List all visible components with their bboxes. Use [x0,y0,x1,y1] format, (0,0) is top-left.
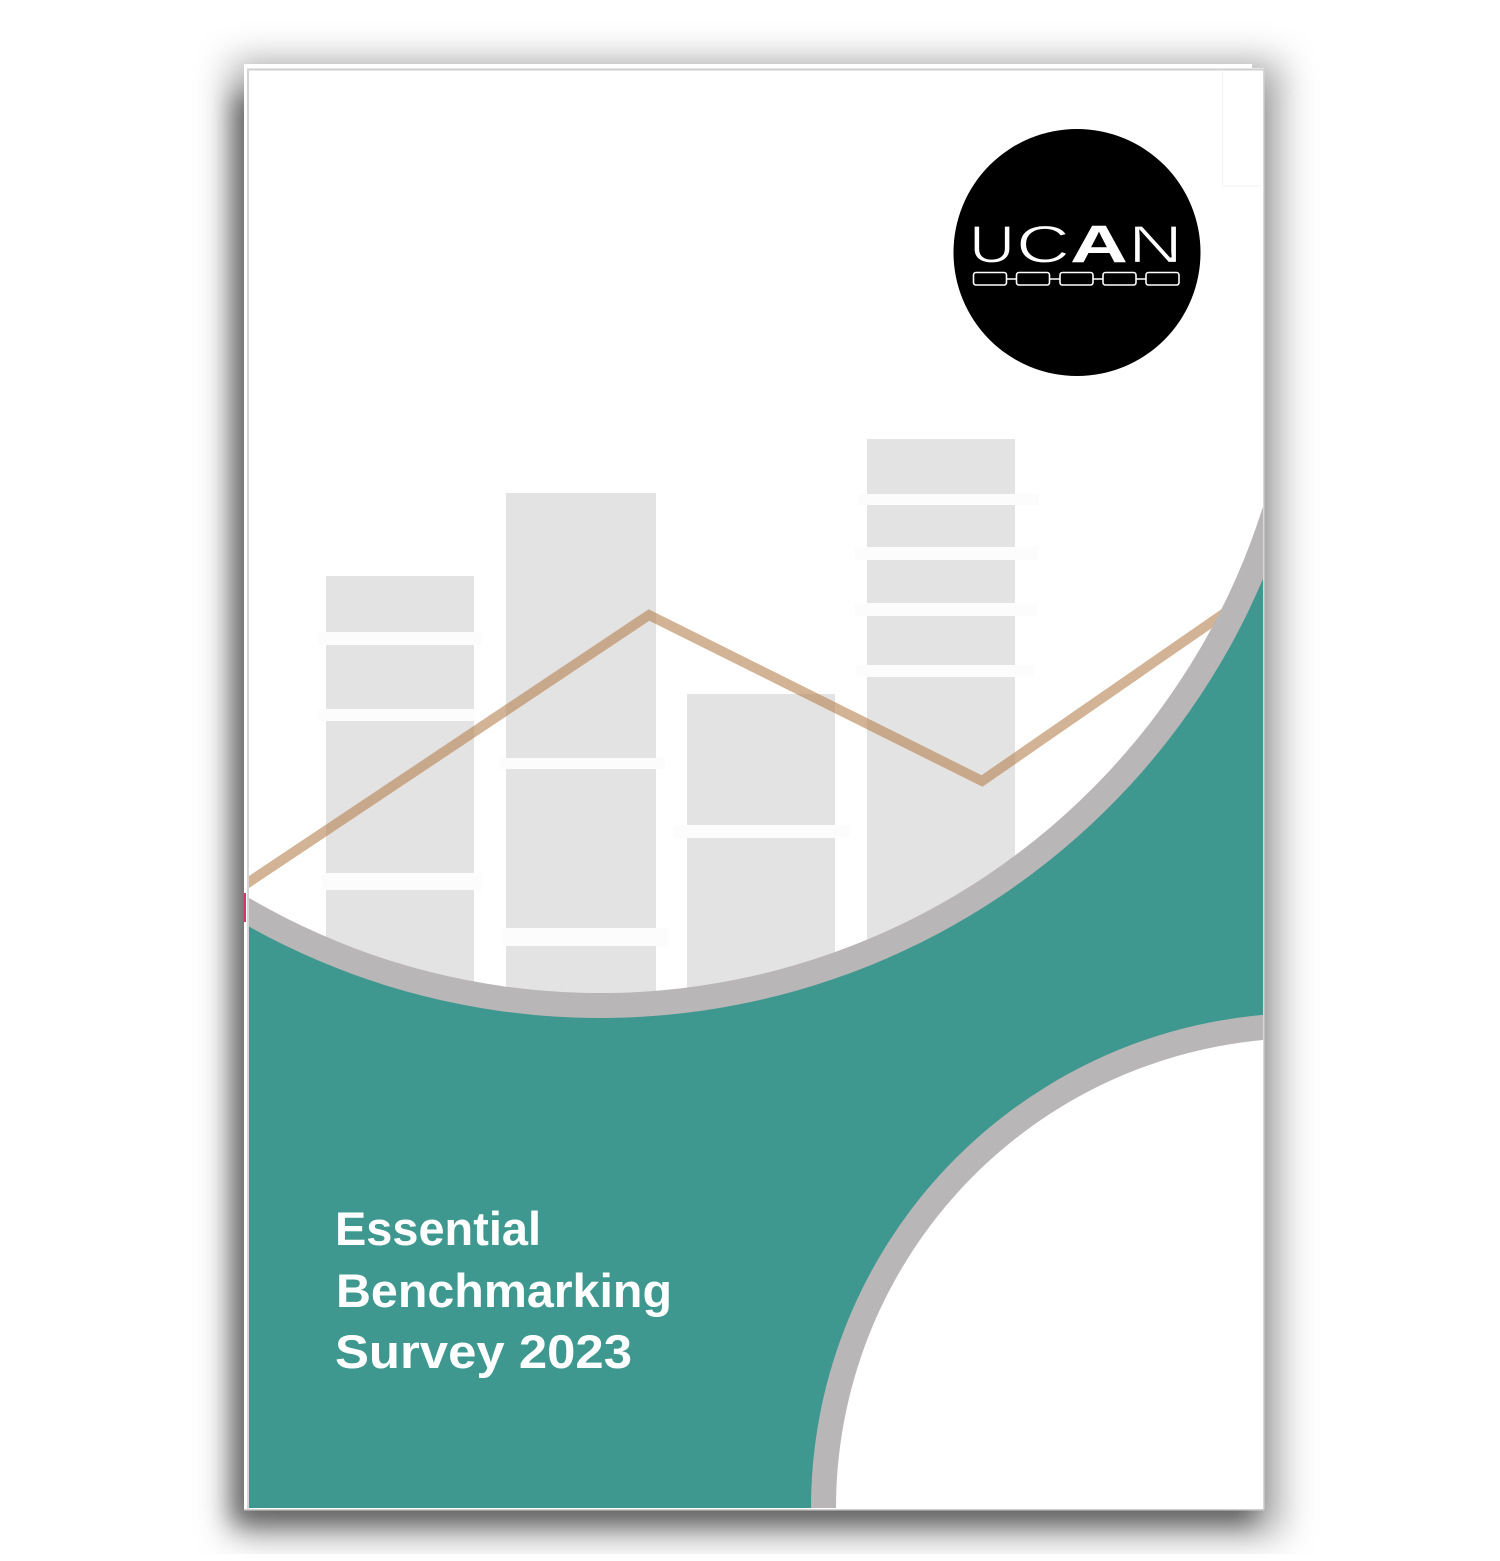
bar 4 [867,439,1015,940]
page drop shadow [232,62,1280,1534]
logo wordmark: A [1070,216,1128,274]
page sheet [244,64,1264,1510]
title: Essential [335,1202,541,1255]
title: Survey 2023 [335,1325,632,1378]
logo wordmark: N [1128,216,1183,274]
title: Benchmarking [336,1264,672,1317]
logo wordmark: U [969,216,1015,274]
logo wordmark: C [1016,216,1070,274]
bar 2 [506,493,656,993]
UCAN logo [954,129,1200,376]
grey curved band [249,506,1263,1018]
bar 1 [326,576,474,982]
bar 3 [687,694,835,988]
trend line [240,608,1232,888]
title [335,1202,672,1378]
bar chart illustration [318,439,1039,1024]
report cover mockup [208,39,1303,1554]
logo chain [974,272,1179,285]
logo wordmark [969,216,1183,274]
teal panel [249,579,1263,1508]
lower right circle with grey ring [811,1015,1263,1508]
